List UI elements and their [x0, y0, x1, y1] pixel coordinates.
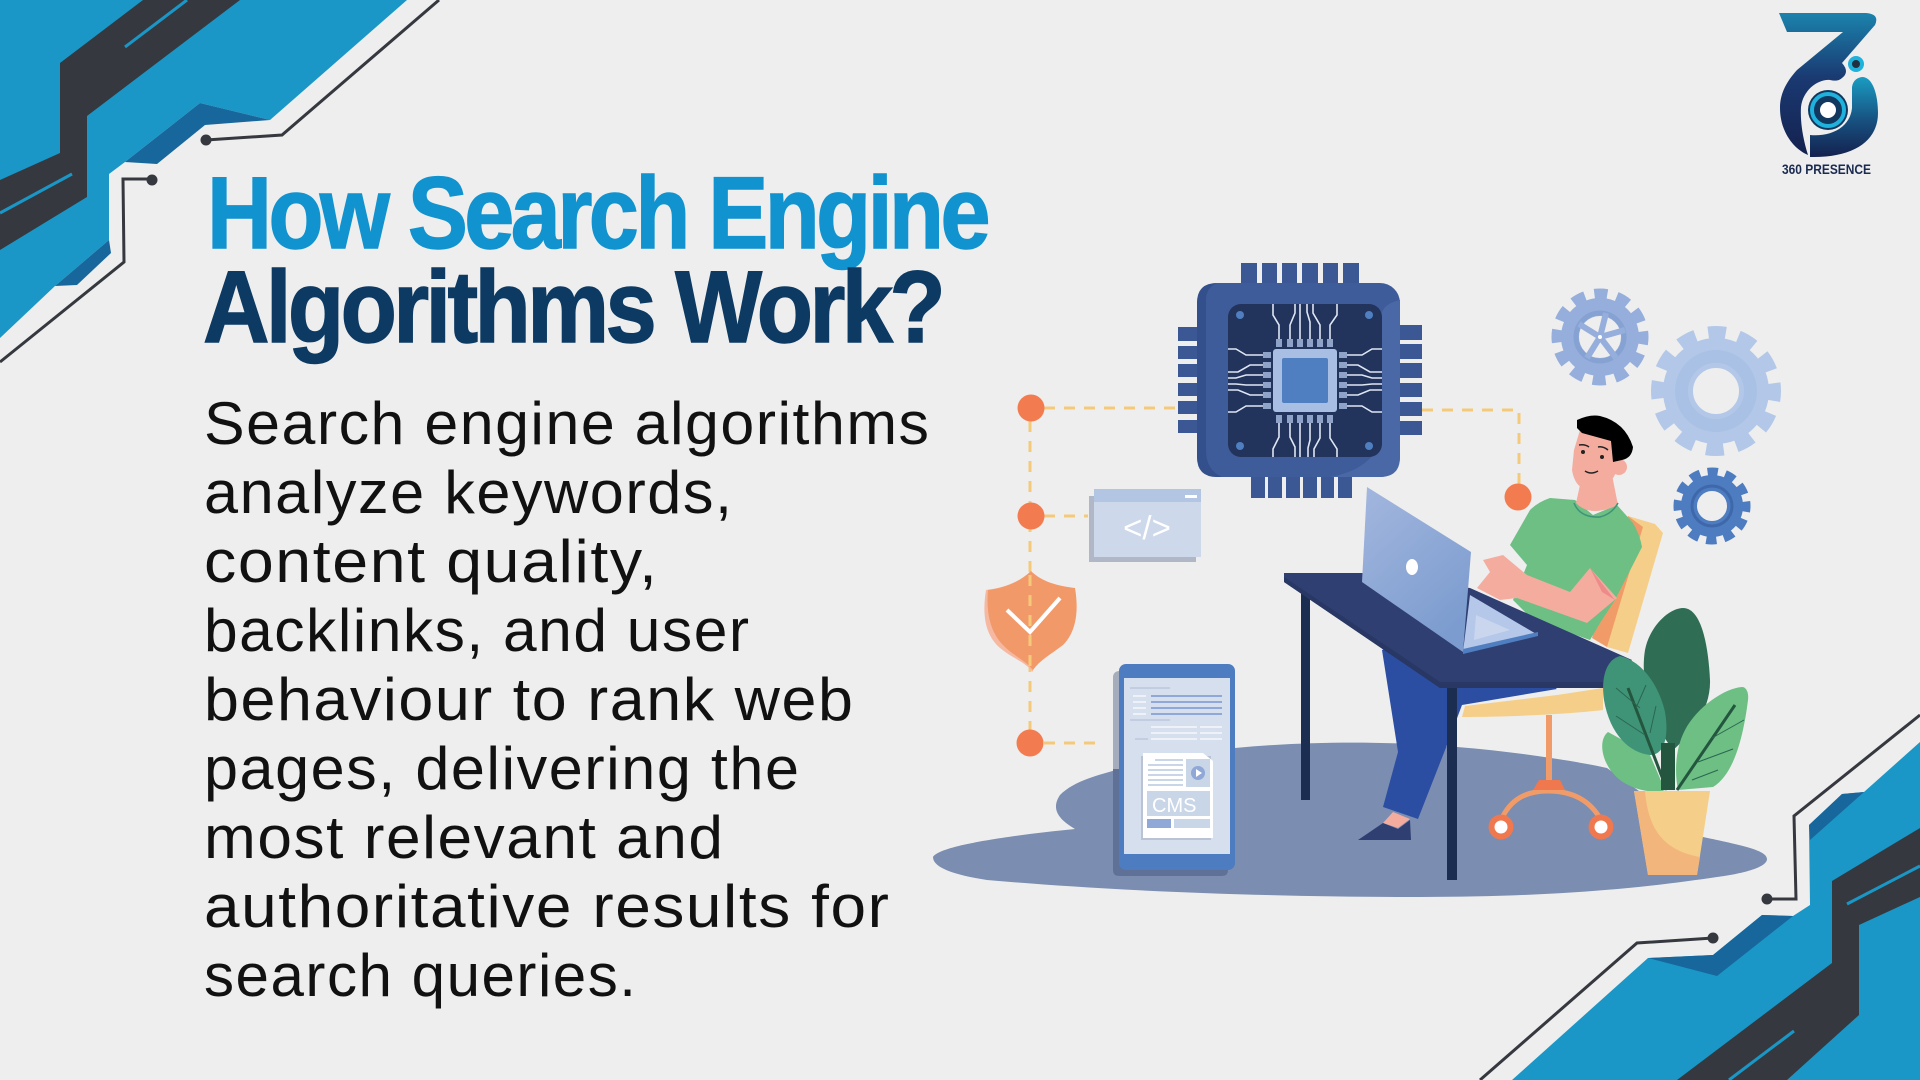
- body text: Search engine algorithms: [204, 390, 930, 457]
- illustration floor shadow: [933, 743, 1767, 897]
- desk: [1284, 573, 1632, 880]
- logo wordmark: 360 PRESENCE: [1782, 161, 1871, 177]
- body text: search queries.: [204, 942, 638, 1009]
- connector lines and nodes: [1016, 394, 1532, 756]
- icon: security shield: [984, 571, 1077, 672]
- icon: code window: [1089, 489, 1201, 562]
- laptop: [1362, 487, 1538, 654]
- title: How Search Engine: [207, 156, 988, 270]
- bottom-right corner decoration: [1480, 715, 1920, 1080]
- icon: code window: </>: [1123, 509, 1171, 546]
- icon: processor chip: [1178, 263, 1422, 498]
- potted plant: [1602, 608, 1748, 875]
- body text: pages, delivering the: [204, 735, 800, 802]
- icon: gear large pale: [1658, 333, 1774, 449]
- body text: authoritative results for: [204, 873, 890, 940]
- body text: most relevant and: [204, 804, 724, 871]
- body text: content quality,: [204, 528, 658, 595]
- title: [203, 156, 988, 364]
- logo mark: [1779, 13, 1878, 157]
- body text: backlinks, and user: [204, 597, 750, 664]
- logo: [1779, 13, 1878, 177]
- icon: CMS tablet: [1113, 664, 1235, 876]
- body text: analyze keywords,: [204, 459, 734, 526]
- icon: gear small blue: [1678, 472, 1746, 540]
- icon: gear spoked: [1557, 294, 1643, 380]
- person: [1358, 416, 1642, 840]
- top-left corner decoration: [0, 0, 439, 362]
- chair: [1462, 516, 1663, 840]
- icon: CMS tablet: CMS: [1152, 795, 1196, 817]
- body text: [204, 390, 930, 1009]
- title: Algorithms Work?: [203, 250, 942, 364]
- body text: behaviour to rank web: [204, 666, 854, 733]
